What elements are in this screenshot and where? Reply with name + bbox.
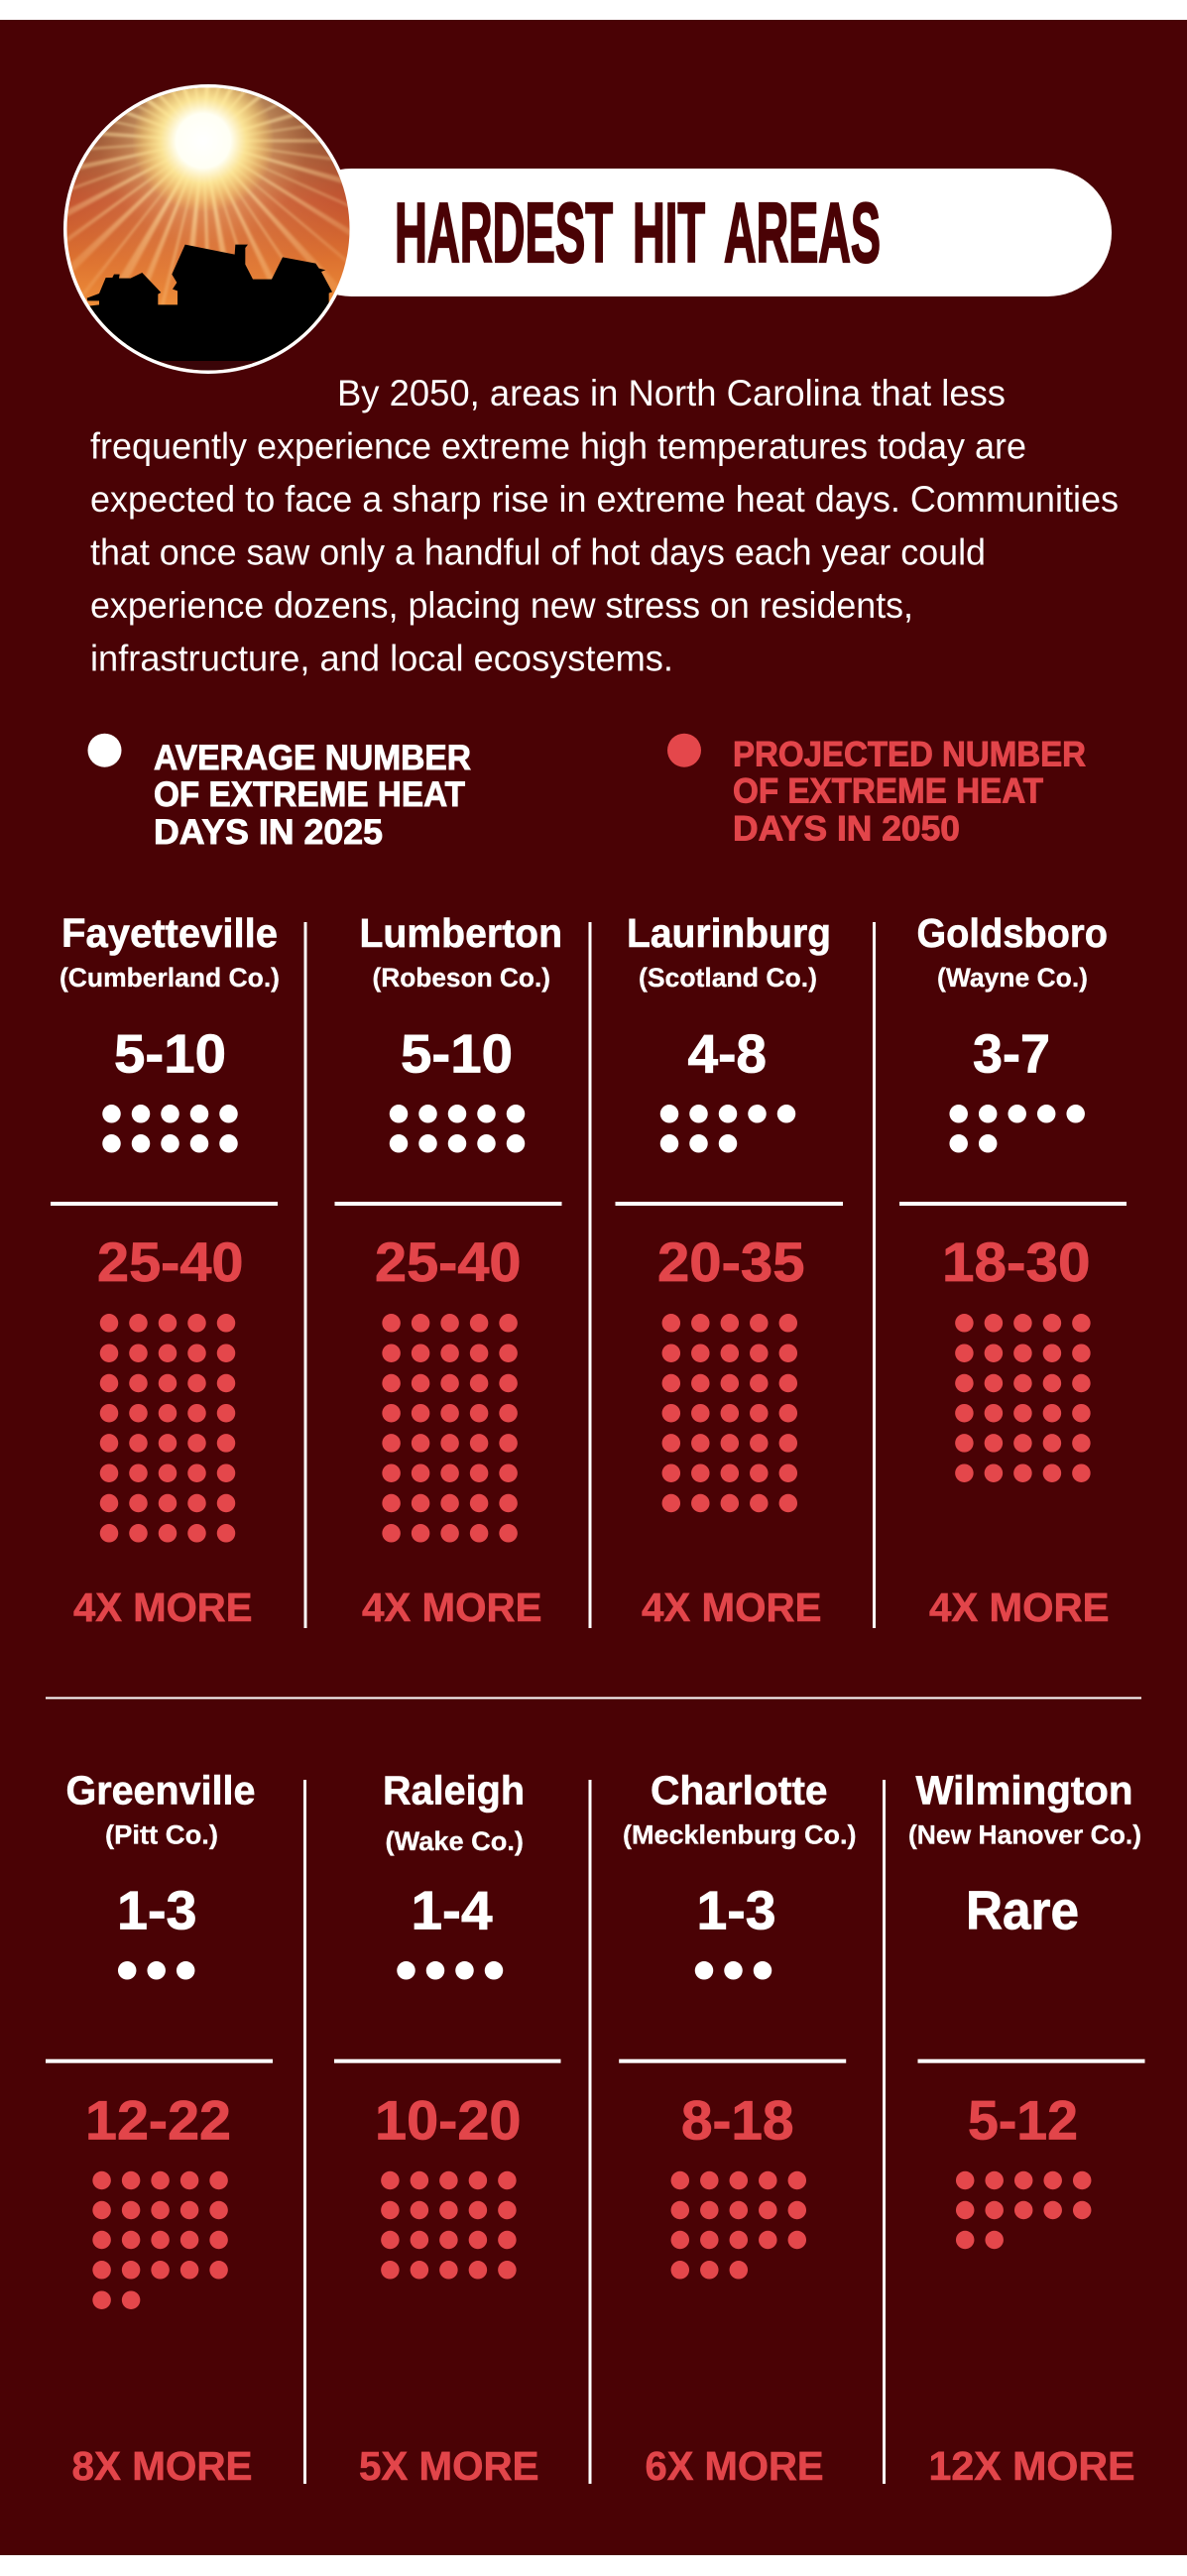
2050 value: 20-35 (657, 1230, 805, 1293)
rule (619, 2059, 846, 2063)
dots 2050 (392, 1323, 509, 1533)
dots 2050 (671, 1323, 788, 1503)
legend white dot (87, 734, 121, 767)
2050 value: 10-20 (375, 2088, 522, 2151)
intro paragraph: that once saw only a handful of hot days each year could (90, 531, 986, 573)
legend red dot (667, 734, 701, 767)
county: (Pitt Co.) (105, 1820, 218, 1850)
rule (51, 1202, 278, 1206)
intro paragraph (90, 373, 1119, 678)
title: HARDEST (395, 186, 613, 281)
intro paragraph: By 2050, areas in North Carolina that less (337, 373, 1006, 413)
county: (Wayne Co.) (937, 963, 1088, 993)
city name: Fayetteville (61, 910, 278, 956)
city name: Charlotte (651, 1767, 827, 1813)
dots 2050 (965, 2180, 1082, 2240)
county: (New Hanover Co.) (908, 1820, 1141, 1850)
panel: Wilmington (908, 1767, 1144, 2489)
county: (Cumberland Co.) (59, 963, 280, 993)
dots 2025 (111, 1113, 229, 1143)
dots 2050 (390, 2180, 508, 2270)
legend text 2025: OF EXTREME HEAT (154, 775, 465, 814)
2025 value: 1-3 (696, 1880, 775, 1941)
2050 value: 8-18 (681, 2088, 793, 2151)
dots 2025 (704, 1961, 763, 1980)
title: AREAS (724, 186, 881, 281)
multiplier: 6X MORE (645, 2443, 823, 2489)
2025 value: 3-7 (973, 1023, 1050, 1085)
2050 value: 18-30 (942, 1230, 1091, 1293)
county: (Mecklenburg Co.) (623, 1820, 857, 1850)
multiplier: 5X MORE (359, 2443, 539, 2489)
panel: Lumberton (335, 910, 562, 1630)
legend text 2025: AVERAGE NUMBER (154, 739, 471, 777)
intro paragraph: frequently experience extreme high temperatures today are (90, 426, 1026, 466)
dots 2050 (964, 1323, 1081, 1473)
legend: 2050 projected (667, 734, 1086, 849)
panel: Greenville (46, 1767, 273, 2489)
legend text 2025 (154, 739, 471, 852)
rule (899, 1202, 1127, 1206)
city name: Raleigh (383, 1767, 525, 1813)
panel: Laurinburg (615, 910, 843, 1630)
city name: Greenville (65, 1767, 256, 1813)
icon: sun over house silhouettes (63, 84, 349, 374)
rule (334, 2059, 561, 2063)
multiplier: 8X MORE (71, 2443, 252, 2489)
multiplier: 4X MORE (73, 1584, 252, 1630)
rule (335, 1202, 561, 1206)
2025 value: Rare (966, 1880, 1079, 1941)
dots 2050 (109, 1323, 226, 1533)
panel: Raleigh (334, 1767, 561, 2489)
dots 2050 (102, 2180, 219, 2300)
multiplier: 12X MORE (928, 2443, 1134, 2489)
dots 2025 (399, 1113, 516, 1143)
panel: Fayetteville (51, 910, 280, 1630)
2050 value: 25-40 (375, 1230, 522, 1293)
multiplier: 4X MORE (362, 1584, 541, 1630)
intro paragraph: infrastructure, and local ecosystems. (90, 639, 673, 678)
legend text 2050 (733, 736, 1086, 849)
2025 value: 1-3 (117, 1880, 196, 1941)
title: HIT (633, 186, 705, 281)
intro paragraph: experience dozens, placing new stress on residents, (90, 585, 913, 626)
city name: Laurinburg (627, 910, 831, 956)
county: (Robeson Co.) (373, 963, 550, 993)
city name: Lumberton (359, 910, 562, 956)
rule (615, 1202, 843, 1206)
legend: 2025 average (87, 734, 471, 852)
dots 2025 (407, 1961, 494, 1980)
legend text 2050: DAYS IN 2050 (733, 809, 960, 849)
multiplier: 4X MORE (929, 1584, 1109, 1630)
city name: Wilmington (916, 1767, 1132, 1813)
panel: Charlotte (619, 1767, 857, 2489)
header (63, 84, 1112, 374)
2025 value: 5-10 (114, 1023, 226, 1085)
2050 value: 5-12 (968, 2088, 1078, 2151)
dots 2025 (669, 1113, 786, 1143)
rule (918, 2059, 1144, 2063)
county: (Scotland Co.) (639, 963, 817, 993)
legend text 2025: DAYS IN 2025 (154, 813, 383, 852)
dots 2025 (127, 1961, 185, 1980)
dots 2050 (680, 2180, 797, 2270)
2025 value: 4-8 (688, 1023, 767, 1085)
legend text 2050: OF EXTREME HEAT (733, 771, 1043, 811)
intro paragraph: expected to face a sharp rise in extreme heat days. Communities (90, 479, 1119, 520)
2025 value: 1-4 (411, 1880, 493, 1941)
multiplier: 4X MORE (642, 1584, 821, 1630)
title pill (288, 169, 1112, 296)
rule (46, 2059, 273, 2063)
2025 value: 5-10 (401, 1023, 513, 1085)
2050 value: 12-22 (85, 2088, 231, 2151)
county: (Wake Co.) (385, 1826, 524, 1856)
legend text 2050: PROJECTED NUMBER (733, 736, 1086, 773)
panel: Goldsboro (899, 910, 1127, 1630)
dots 2025 (959, 1113, 1076, 1143)
2050 value: 25-40 (97, 1230, 244, 1293)
city name: Goldsboro (916, 910, 1108, 956)
